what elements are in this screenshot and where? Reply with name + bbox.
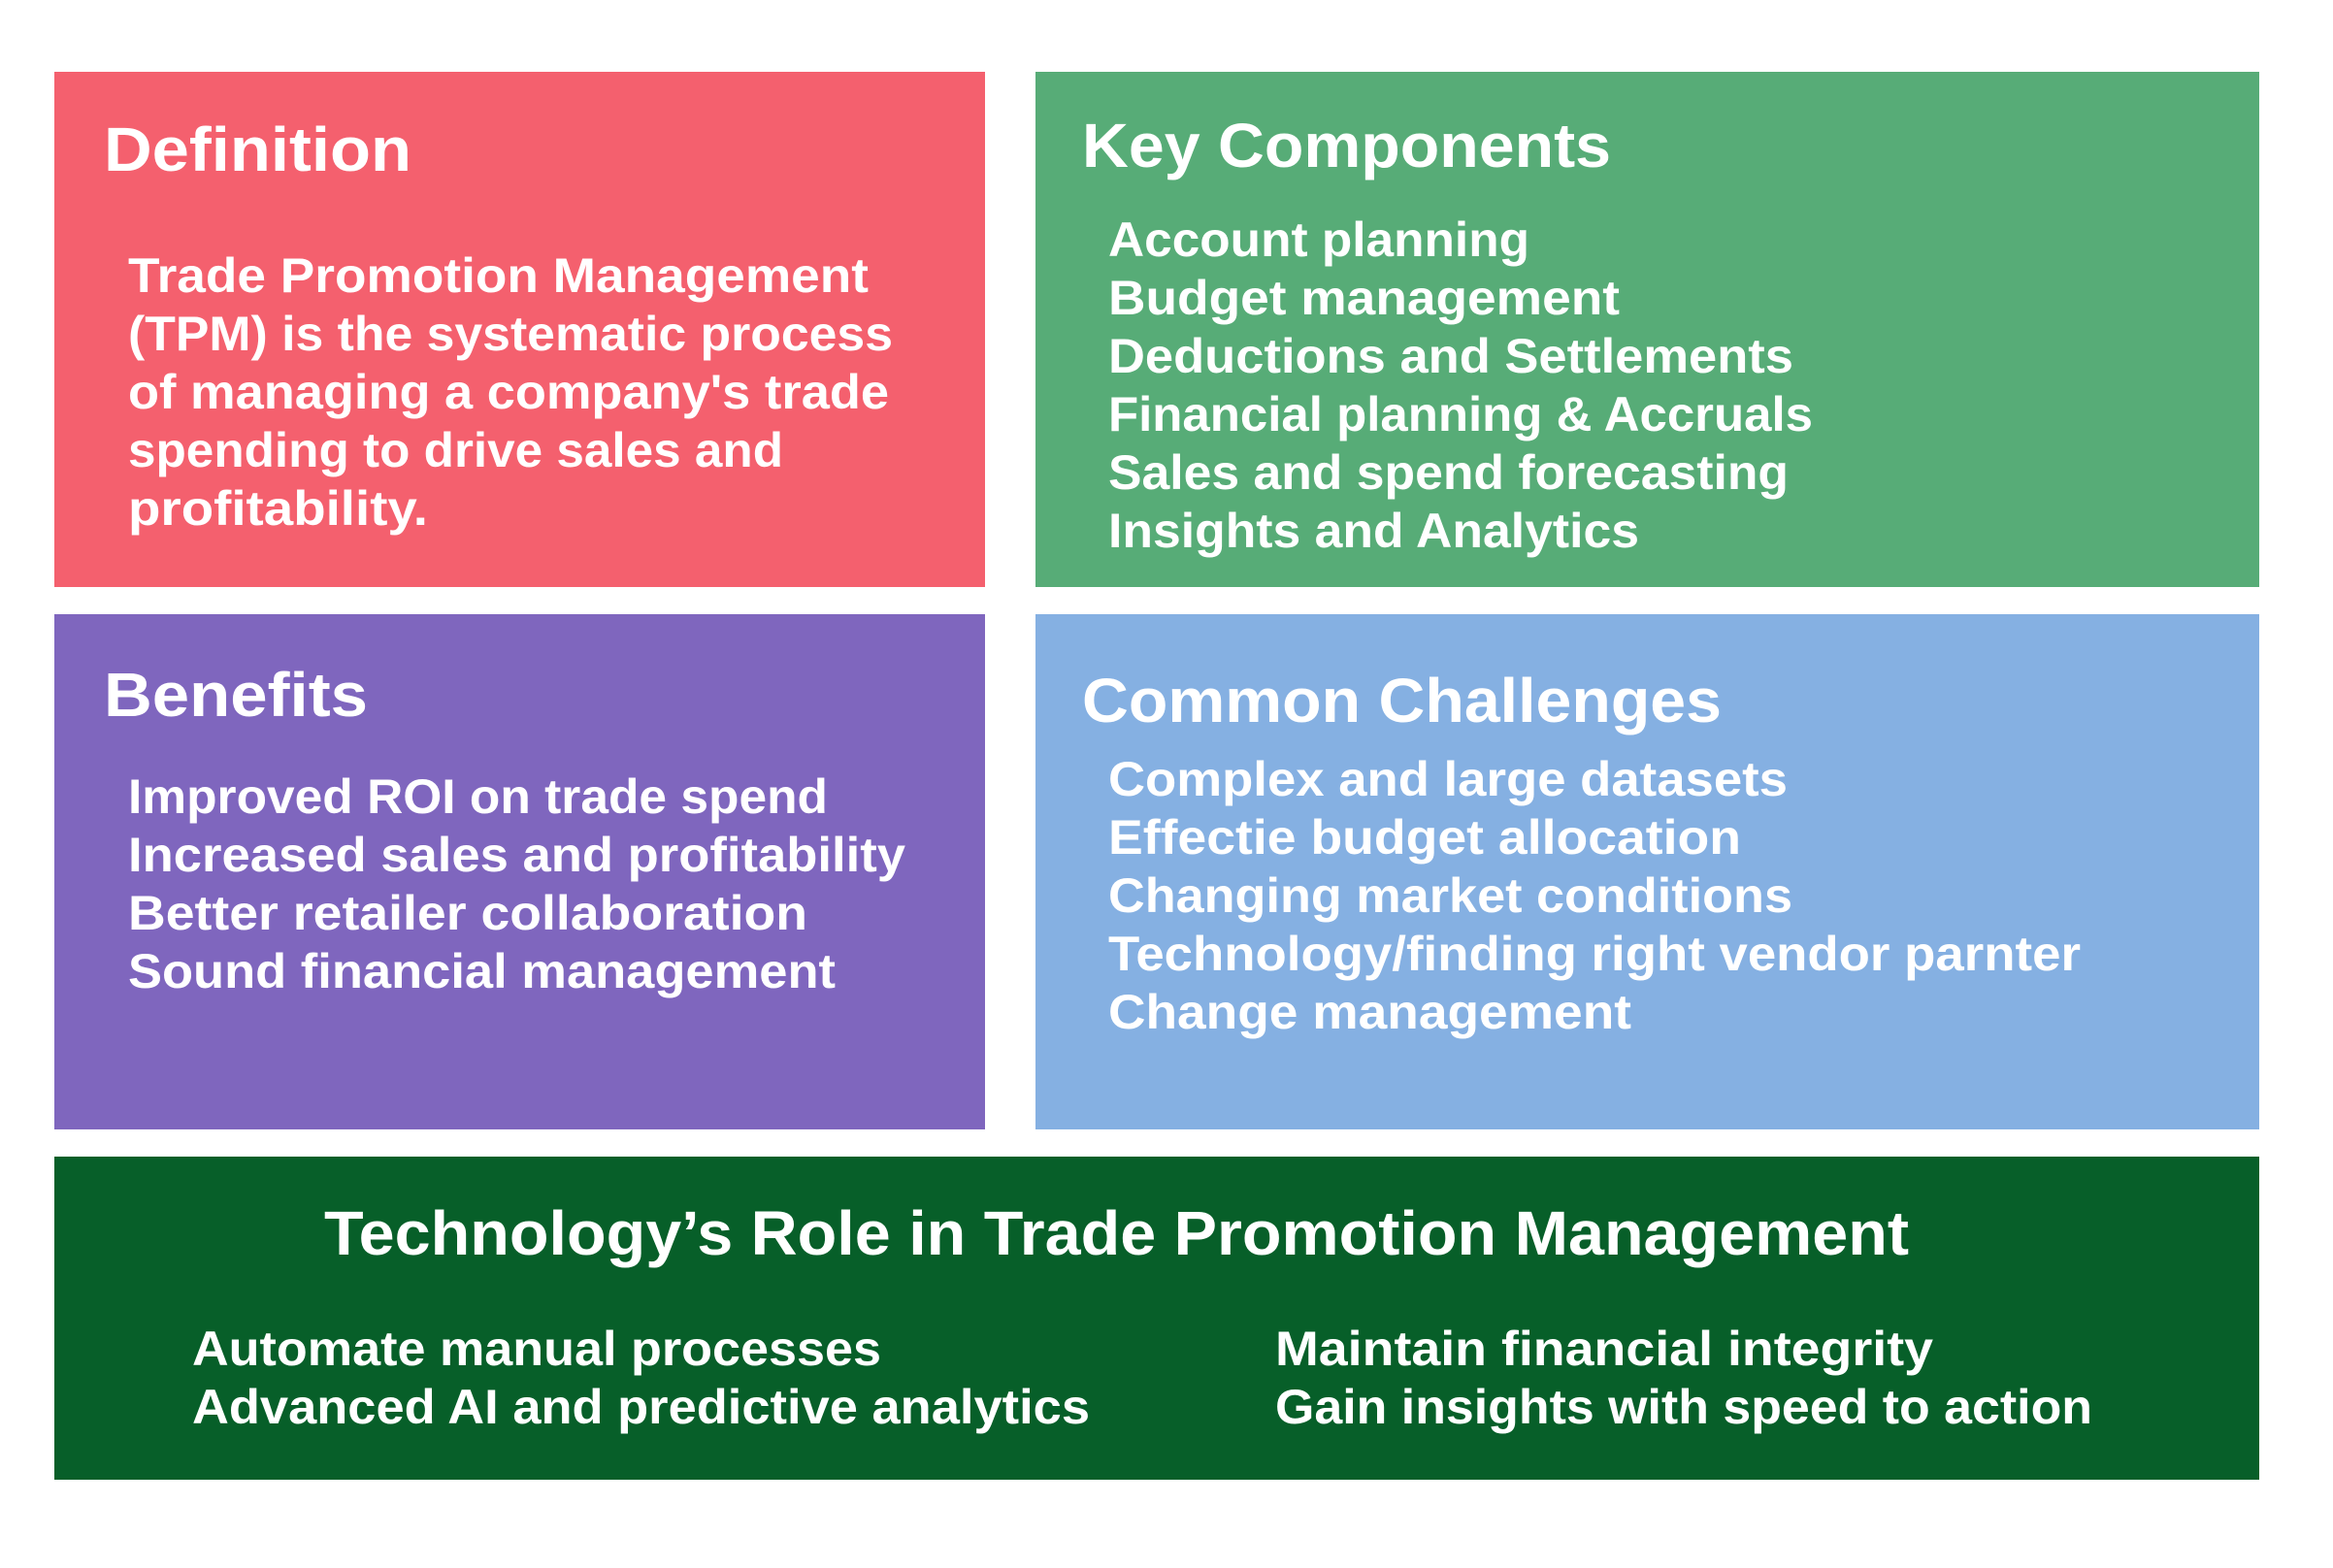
common challenges background xyxy=(1035,614,2259,1129)
text block: common challenges list: Complex and large datasets xyxy=(1108,752,1788,806)
text block: technology left column xyxy=(192,1322,1090,1434)
text block: common challenges list: Technology/finding right vendor parnter xyxy=(1108,927,2081,981)
text block: benefits list: Better retailer collaboration xyxy=(128,886,807,940)
text block: key components list: Financial planning & Accruals xyxy=(1108,387,1813,441)
heading: benefits: Benefits xyxy=(104,660,368,730)
panel: technology's role xyxy=(54,1157,2259,1480)
text block: technology right column: Gain insights with speed to action xyxy=(1275,1380,2092,1434)
text block: common challenges list: Change management xyxy=(1108,985,1631,1039)
text block: definition body: of managing a company's trade xyxy=(128,365,889,419)
heading: key components: Key Components xyxy=(1082,111,1611,180)
text block: key components list: Insights and Analytics xyxy=(1108,504,1639,558)
text block: benefits list: Sound financial management xyxy=(128,944,836,998)
text block: definition body: profitability. xyxy=(128,481,428,536)
text block: common challenges list: Effectie budget allocation xyxy=(1108,810,1741,865)
panel: key components xyxy=(1035,72,2259,587)
text block: definition body: spending to drive sales and xyxy=(128,423,783,477)
text block: key components list: Deductions and Settlements xyxy=(1108,329,1793,383)
benefits background xyxy=(54,614,985,1129)
text block: benefits list: Improved ROI on trade spend xyxy=(128,769,828,824)
technology panel background xyxy=(54,1157,2259,1480)
text block: key components list: Budget management xyxy=(1108,271,1620,325)
text block: technology left column: Automate manual processes xyxy=(192,1322,881,1376)
heading: technology's role: Technology’s Role in Trade Promotion Management xyxy=(324,1198,1909,1268)
text block: key components list: Account planning xyxy=(1108,212,1529,267)
panel: benefits xyxy=(54,614,985,1129)
panel: definition xyxy=(54,72,985,587)
heading: definition: Definition xyxy=(104,114,411,184)
text block: common challenges list: Changing market conditions xyxy=(1108,868,1792,923)
text block: benefits list: Increased sales and profitability xyxy=(128,828,905,882)
text block: common challenges list xyxy=(1108,752,2081,1039)
heading: common challenges: Common Challenges xyxy=(1082,666,1722,735)
text block: technology left column: Advanced AI and predictive analytics xyxy=(192,1380,1090,1434)
text block: definition body xyxy=(128,248,893,536)
panel: common challenges xyxy=(1035,614,2259,1129)
text block: benefits list xyxy=(128,769,905,998)
text block: definition body: (TPM) is the systematic process xyxy=(128,307,893,361)
text block: technology right column xyxy=(1275,1322,2092,1434)
text block: key components list xyxy=(1108,212,1813,558)
key components background xyxy=(1035,72,2259,587)
text block: key components list: Sales and spend forecasting xyxy=(1108,445,1789,500)
text block: technology right column: Maintain financial integrity xyxy=(1275,1322,1933,1376)
definition background xyxy=(54,72,985,587)
text block: definition body: Trade Promotion Management xyxy=(128,248,869,303)
